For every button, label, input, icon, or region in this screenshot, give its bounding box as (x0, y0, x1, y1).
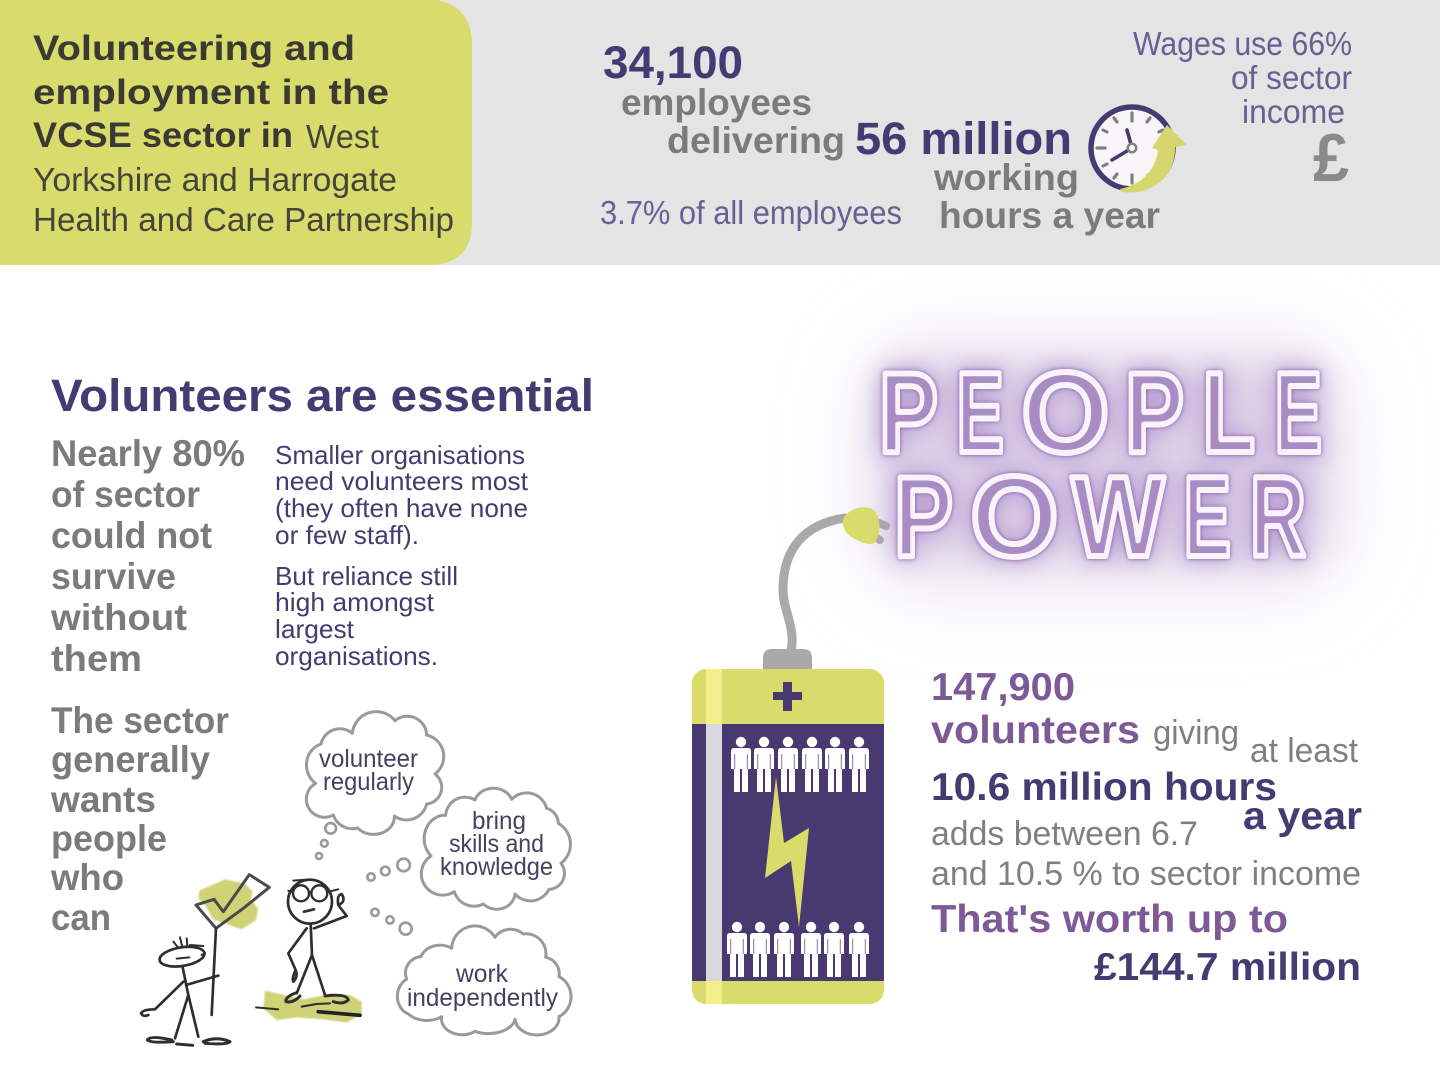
text block: smaller organisations: organisations. (275, 641, 438, 671)
volunteers statistics: giving (1153, 714, 1239, 752)
title: people power: P (879, 350, 938, 477)
panel: title (0, 0, 472, 265)
text block: the sector wants: people (51, 818, 167, 859)
text block: the sector wants: generally (51, 739, 210, 780)
text block: the sector wants: The sector (51, 700, 229, 741)
text block: the sector wants: wants (50, 779, 156, 820)
panel: title: Health and Care Partnership (33, 201, 454, 238)
volunteers statistics: and 10.5 % to sector income (931, 855, 1361, 893)
text block: smaller organisations: high amongst (275, 587, 435, 617)
cloud labels: regularly (323, 768, 414, 796)
employees statistic: 34,100 (603, 37, 743, 88)
text block: nearly 80%: of sector (51, 474, 200, 515)
plus sign (773, 682, 802, 711)
volunteers statistics: at least (1250, 732, 1359, 770)
cloud labels: independently (407, 984, 558, 1012)
title art glow (850, 325, 1360, 605)
header band (0, 0, 1440, 265)
text block: the sector wants: can (51, 897, 111, 938)
text block: the sector wants: who (50, 857, 124, 898)
text block: nearly 80%: Nearly 80% (51, 433, 245, 474)
thought cloud: independently (397, 926, 571, 1035)
title: people power: P (894, 454, 953, 581)
panel: title: Volunteering and (33, 29, 355, 68)
text block: smaller organisations: largest (275, 614, 355, 644)
battery cap (763, 649, 812, 669)
checkmark sign (196, 875, 269, 928)
lightning bolt (765, 777, 809, 927)
wages statistic: income (1242, 93, 1345, 130)
cloud labels: volunteer (319, 745, 418, 773)
panel: title: West (306, 118, 379, 155)
text block: nearly 80%: them (51, 638, 142, 679)
text block: smaller organisations: (they often have none (275, 493, 528, 523)
panel: title: Yorkshire and Harrogate (33, 161, 397, 198)
volunteers statistics: That's worth up to (931, 898, 1288, 941)
title: people power: L (1202, 350, 1255, 477)
cloud labels: work (455, 960, 508, 988)
employees statistic: delivering (667, 120, 845, 161)
wages statistic: of sector (1231, 59, 1352, 96)
title: people power (879, 350, 1322, 581)
cloud labels (319, 745, 558, 1012)
volunteers statistics: a year (1243, 795, 1362, 838)
volunteers statistics: 10.6 million hours (931, 766, 1277, 809)
volunteers statistics: volunteers (931, 709, 1140, 752)
title: people power: E (1184, 454, 1231, 581)
thought clouds (306, 712, 571, 1035)
volunteers statistics (931, 666, 1362, 989)
thought cloud: volunteer regularly (306, 712, 444, 834)
people icons (727, 737, 869, 977)
working hours statistic (855, 113, 1160, 236)
wages statistic (1133, 25, 1352, 196)
working hours statistic: working (933, 157, 1079, 198)
title: people power: O (970, 454, 1058, 581)
text block: smaller organisations: Smaller organisations (275, 440, 525, 470)
text block: nearly 80% (50, 433, 245, 679)
employees statistic: employees (621, 82, 812, 123)
title: people power: E (956, 350, 1004, 477)
working hours statistic: 56 million (855, 113, 1072, 164)
volunteers statistics: adds between 6.7 (931, 815, 1198, 853)
icon: pound sign: £ (1313, 120, 1349, 196)
thought cloud: skills (421, 788, 570, 909)
text block: smaller organisations: or few staff). (275, 520, 419, 550)
yellow scribbles (198, 879, 362, 1023)
cloud labels: skills and (449, 830, 544, 858)
text block: nearly 80%: without (50, 597, 187, 638)
text block: nearly 80%: could not (51, 515, 212, 556)
text block: smaller organisations: But reliance still (275, 561, 458, 591)
icon: clock with arrow (1091, 107, 1187, 193)
text block: smaller organisations: need volunteers most (275, 466, 529, 496)
battery (692, 649, 884, 1004)
title: people power: O (1022, 350, 1110, 477)
wages statistic: Wages use 66% (1133, 25, 1352, 62)
figure holding sign (141, 928, 230, 1045)
cloud labels: knowledge (440, 853, 553, 881)
employees statistic (600, 37, 902, 231)
figure thinking (256, 879, 360, 1015)
cable and plug (783, 507, 886, 651)
text block: nearly 80%: survive (51, 556, 176, 597)
panel: title: VCSE sector in (33, 116, 293, 155)
employees statistic: 3.7% of all employees (600, 194, 902, 231)
heading: volunteers are essential: Volunteers are essential (51, 370, 594, 421)
battery body (692, 669, 884, 1004)
title: people power: P (1125, 350, 1184, 477)
text block: smaller organisations (275, 440, 529, 671)
panel: title: employment in the (33, 73, 389, 112)
volunteers statistics: £144.7 million (1094, 946, 1361, 989)
title: people power: R (1250, 454, 1306, 581)
thought bubbles (316, 823, 412, 935)
volunteers statistics: 147,900 (931, 666, 1075, 709)
cloud labels: bring (472, 807, 526, 835)
title: people power: W (1072, 454, 1165, 581)
working hours statistic: hours a year (939, 195, 1160, 236)
text block: the sector wants (50, 700, 229, 938)
illustration: stick figures (141, 875, 362, 1045)
title: people power: E (1274, 350, 1322, 477)
